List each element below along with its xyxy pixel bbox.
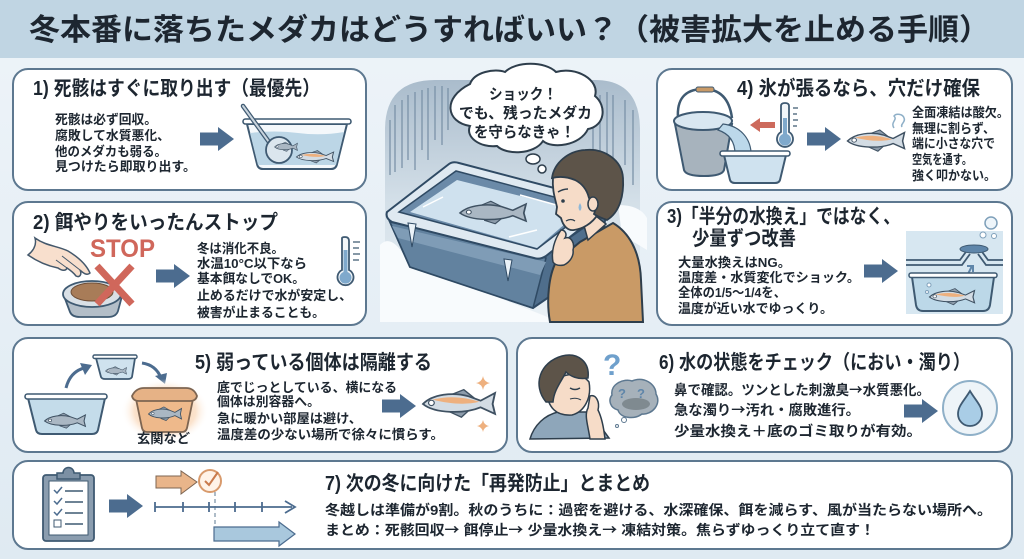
heading: step 5: 5) 弱っている個体は隔離する: [195, 351, 432, 374]
heading: step 3: 少量ずつ改善: [692, 227, 796, 250]
heading: step 4: 4) 氷が張るなら、穴だけ確保: [737, 76, 980, 100]
icon: stop label: STOP: [90, 235, 155, 263]
heading: step 3: [667, 205, 900, 250]
text: step 3 body: 温度差・水質変化でショック。: [678, 270, 860, 285]
text: step 6 body: 鼻で確認。ツンとした刺激臭→水質悪化。: [674, 380, 930, 400]
speech bubble: [450, 64, 603, 173]
heading: step 6: 6) 水の状態をチェック（におい・濁り）: [659, 351, 970, 374]
panel: step 3 small water changes: [657, 202, 1012, 325]
speech bubble: でも、残ったメダカ: [459, 104, 592, 122]
text: step 1 body: 腐敗して水質悪化、: [55, 128, 170, 143]
text: step 6 body: [674, 380, 930, 439]
text: step 3 body: 全体の1/5〜1/4を、: [678, 285, 786, 300]
icon: frozen tub: [387, 162, 606, 308]
arrow: [156, 264, 190, 288]
heading: step 7: 7) 次の冬に向けた「再発防止」とまとめ: [325, 472, 650, 495]
arrow: [904, 399, 938, 423]
icon: question mark: ?: [603, 349, 621, 382]
speech bubble: を守らなきゃ！: [474, 123, 575, 141]
text: step 7 body: [325, 502, 992, 540]
icon: feeding hand: [28, 238, 90, 277]
text: step 2 body: 基本餌なしでOK。: [197, 271, 305, 286]
text: step 5 body: 温度差の少ない場所で徐々に慣らす。: [217, 427, 444, 442]
arrow: [109, 494, 143, 518]
text: step 6 body: 少量水換え＋底のゴミ取りが有効。: [674, 423, 922, 439]
icon: fish with bubbles: [848, 114, 904, 151]
arrow: heat: [750, 118, 775, 132]
winter backdrop: [385, 80, 640, 320]
text: step 2 body: 冬は消化不良。: [197, 241, 284, 256]
heading: step 1: 1) 死骸はすぐに取り出す（最優先）: [33, 77, 320, 100]
icon: moving fish between tubs: [25, 355, 209, 446]
title band: [0, 0, 1024, 58]
icon: timeline with checkpoint: [155, 470, 295, 546]
arrow: [864, 259, 898, 283]
panel: step 7 prevention and summary: [13, 461, 1012, 549]
text: step 2 body: [197, 241, 352, 320]
text: step 4 body: 空気を通す。: [912, 152, 972, 167]
snow: [380, 205, 647, 322]
icon: murky cloud: ?: [618, 386, 626, 401]
icon: worried person: [548, 150, 643, 322]
speech bubble: ショック！: [489, 86, 557, 103]
text: step 1 body: [55, 112, 196, 174]
title: 冬本番に落ちたメダカはどうすればいい？（被害拡大を止める手順）: [29, 13, 990, 47]
text: step 4 body: 全面凍結は酸欠。: [912, 105, 1009, 120]
panel: central illustration: [380, 64, 647, 322]
icon: recovered fish with sparkles: [423, 376, 495, 432]
text: step 2 body: 止めるだけで水が安定し、: [197, 288, 352, 303]
text: step 4 body: 強く叩かない。: [912, 168, 996, 183]
text: step 4 body: 無理に割らず、: [912, 121, 995, 136]
heading: step 3: 3)「半分の水換え」ではなく、: [667, 205, 900, 228]
panel: step 6 check the water: [517, 338, 1012, 452]
text: step 3 body: 大量水換えはNG。: [678, 255, 791, 270]
panel: step 1 remove the dead fish: [13, 69, 366, 190]
text: step 1 body: 見つけたら即取り出す。: [55, 159, 196, 174]
text: step 4 body: [912, 105, 1009, 183]
text: step 4 body: 端に小さな穴で: [912, 136, 995, 151]
label: entrance: 玄関など: [137, 431, 190, 446]
icon: person smelling: [530, 355, 609, 439]
text: step 1 body: 死骸は必ず回収。: [55, 112, 157, 127]
icon: water surface, basin and fish: [906, 217, 1003, 314]
arrow: [807, 127, 841, 151]
panel: step 4 keep a hole in the ice: [657, 69, 1012, 190]
text: step 7 body: 冬越しは準備が9割。秋のうちに：過密を避ける、水深確保、餌を減らす、風が当たらない場所へ。: [325, 502, 992, 518]
text: step 6 body: 急な濁り→汚れ・腐敗進行。: [674, 400, 860, 420]
icon: stop label: [90, 235, 155, 304]
text: step 5 body: 底でじっとしている、横になる: [217, 380, 397, 395]
icon: food bowl: [63, 281, 122, 317]
icon: bucket and basin: [674, 87, 790, 183]
heading: step 2: 2) 餌やりをいったんストップ: [33, 211, 278, 234]
text: step 5 body: 個体は別容器へ。: [217, 394, 320, 409]
text: step 1 body: 他のメダカも弱る。: [55, 144, 167, 159]
text: step 3 body: [678, 255, 860, 316]
text: step 2 body: 被害が止まることも。: [197, 305, 325, 320]
text: step 5 body: [217, 380, 444, 442]
icon: clipboard checklist: [43, 468, 94, 541]
panel: step 2 stop feeding: [13, 202, 366, 325]
icon: tub with net and fish: [243, 106, 351, 169]
arrow: [382, 394, 416, 418]
text: step 5 body: 急に暖かい部屋は避け、: [217, 411, 362, 426]
icon: thermometer: [777, 103, 798, 147]
text: step 7 body: まとめ：死骸回収 → 餌停止→ 少量水換え → 凍結対策。焦らずゆっくり立て直す！: [325, 520, 875, 540]
icon: murky cloud: [610, 379, 658, 428]
icon: thermometer: [338, 237, 360, 285]
arrow: [200, 127, 234, 151]
text: step 2 body: 水温10°C以下なら: [197, 256, 307, 271]
text: step 3 body: 温度が近い水でゆっくり。: [678, 301, 833, 316]
icon: water drop: [943, 381, 997, 435]
panel: step 5 isolate weak fish: [13, 338, 507, 452]
icon: murky cloud: ?: [637, 386, 645, 401]
